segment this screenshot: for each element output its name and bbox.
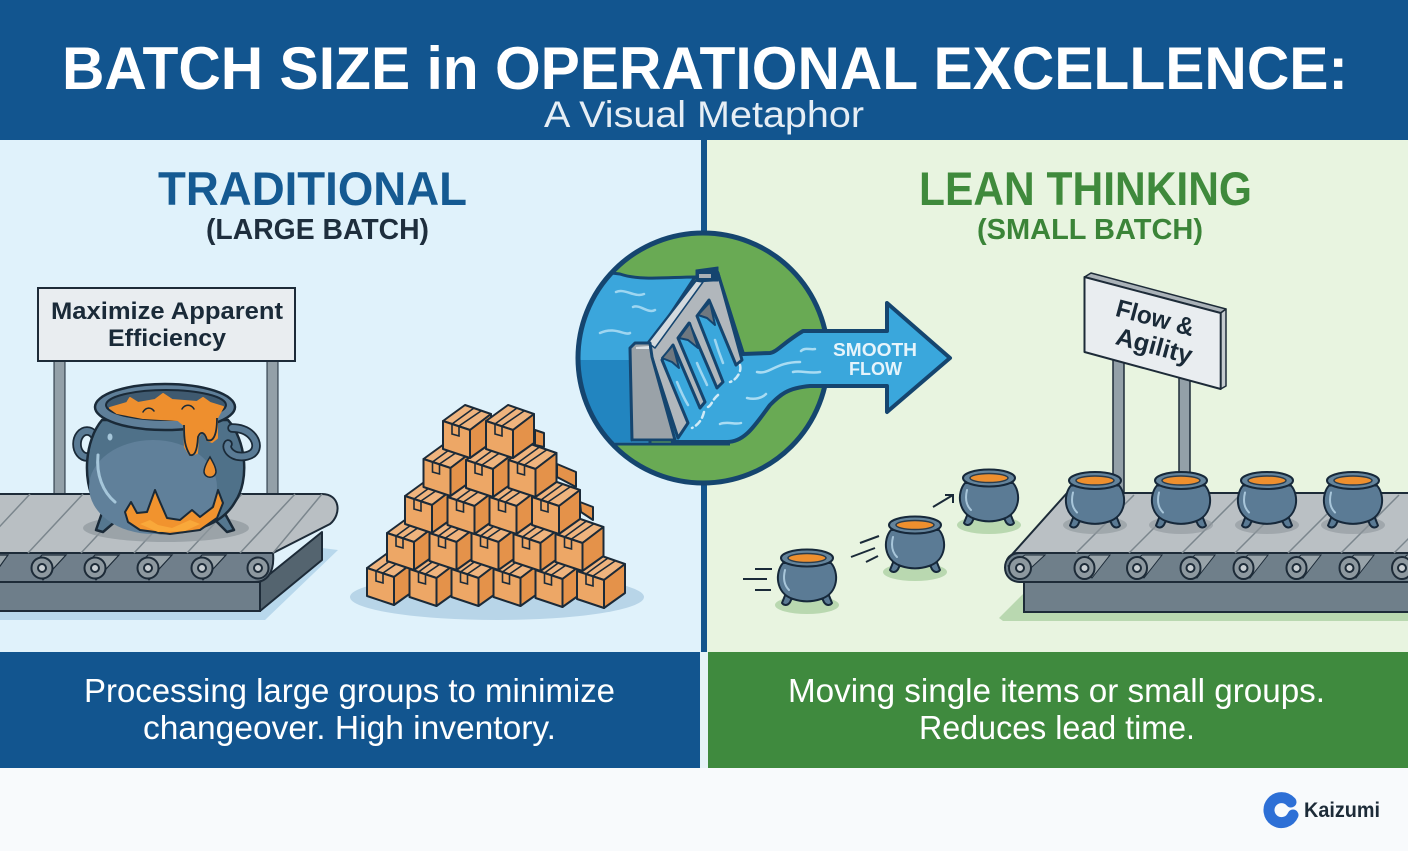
panel: lean background [707,140,1408,652]
molten contents [110,394,223,455]
caption bar: traditional: changeover. High inventory. [143,709,556,746]
sign: maximize apparent efficiency: Efficiency [108,325,227,352]
sign: flow and agility: Flow & [1113,294,1197,342]
row 3 [405,480,453,533]
row 1 [367,552,415,605]
sign: flow and agility [1084,273,1226,495]
heading: lean thinking [919,162,1252,246]
row 5 [443,405,491,458]
sign: flow and agility: Agility [1113,323,1195,370]
conveyor: lean [999,493,1408,621]
centre divider [701,140,707,652]
river and arrow [650,272,950,442]
small pot moving 2 with motion lines [851,516,947,581]
feet [96,510,117,532]
body [87,420,244,533]
small pot moving 1 with motion lines [743,550,839,614]
small pots on conveyor [1063,472,1385,534]
caption bar: traditional: Processing large groups to minimize [84,672,615,709]
title: BATCH SIZE in OPERATIONAL EXCELLENCE: [62,35,1348,102]
dam structure [648,273,742,438]
heading: traditional [158,162,467,246]
heading: lean thinking: LEAN THINKING [919,162,1252,215]
caption bar: lean: Reduces lead time. [919,709,1195,746]
conveyor: traditional [0,494,338,620]
foam and ripples [692,365,740,428]
header banner [0,0,1408,140]
left handle [77,431,97,457]
icon: dam and smooth flow arrow: FLOW [849,358,903,379]
row 4 [424,443,472,496]
row 2 [387,517,435,570]
caption bar: lean [708,652,1408,768]
rollers [1009,557,1408,579]
heading: lean thinking: (SMALL BATCH) [977,214,1203,246]
sign: maximize apparent efficiency: Maximize Apparent [51,298,283,325]
heading: traditional: (LARGE BATCH) [206,214,429,246]
icon: dam and smooth flow arrow [570,233,950,483]
heading: traditional: TRADITIONAL [158,162,467,215]
green disc [578,233,828,483]
small pot moving 3 with arrow [933,470,1021,534]
rim [95,384,235,430]
sign: maximize apparent efficiency [38,288,295,495]
logo: Kaizumi [1269,798,1380,823]
rollers [0,558,268,578]
arrow label: SMOOTH [833,339,917,360]
caption bar: lean: Moving single items or small groups. [788,672,1325,709]
disc outline [578,233,828,483]
right handle [227,428,256,456]
icon: overflowing cauldron [77,384,256,542]
logo: Kaizumi: Kaizumi [1304,799,1380,822]
caption bar gap [700,652,708,768]
subtitle: A Visual Metaphor [544,94,864,135]
reservoir [580,272,696,443]
caption bar: traditional [0,652,700,768]
icon: pile of boxes [350,405,644,620]
flames [125,490,223,534]
back boxes [535,430,593,520]
panel: traditional background [0,140,701,652]
